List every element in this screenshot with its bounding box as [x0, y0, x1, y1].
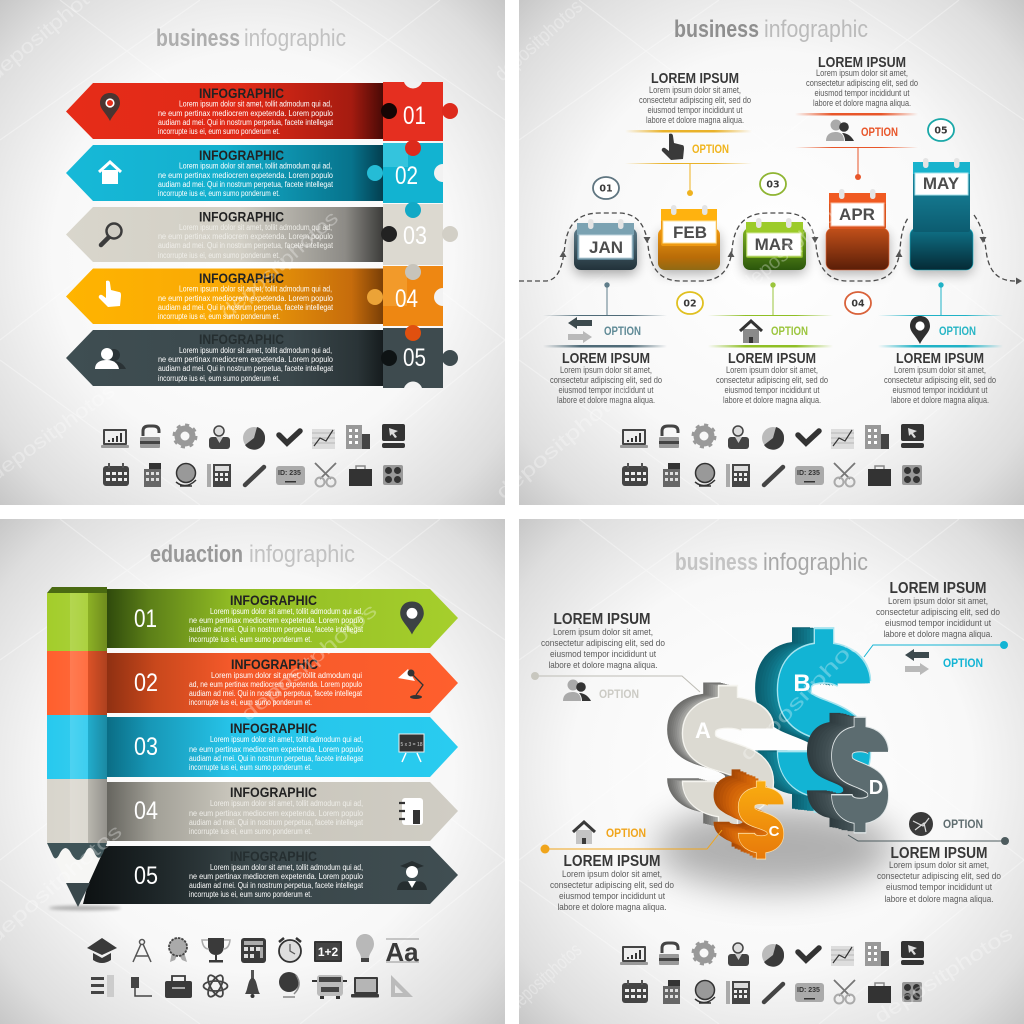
calendar APR: APR [839, 205, 875, 224]
arrow row 04 amber [66, 268, 383, 324]
callout: mar option: consectetur adipiscing elit, sed do [716, 375, 828, 385]
calendar MAR [743, 218, 806, 274]
callout B: Lorem ipsum dolor sit amet, [888, 596, 988, 606]
arrow row 01 red [66, 83, 383, 139]
heading: infographic: INFOGRAPHIC [230, 592, 317, 608]
badge 03: 03 [766, 180, 780, 190]
badge 03 [760, 173, 786, 195]
text block: ne eum pertinax mediocrem expetenda. Lorem populo [189, 616, 363, 625]
arrow row 04 beige [107, 782, 458, 841]
text block: ne eum pertinax mediocrem expetenda. Lorem populo [158, 294, 333, 303]
callout D: LOREM IPSUM [890, 845, 988, 862]
icon: desk globe [279, 972, 299, 997]
text block: ne eum pertinax mediocrem expetenda. Lorem populo [158, 232, 333, 241]
watermark: depositphotos [505, 939, 586, 1016]
heading: infographic: INFOGRAPHIC [199, 270, 284, 286]
title: business infographic [674, 16, 868, 43]
badge 05 [928, 119, 954, 141]
text block: incorrupte ius ei, eum sumo ponderum et. [158, 374, 280, 383]
callout: feb option [625, 70, 752, 196]
heading: infographic: INFOGRAPHIC [231, 656, 318, 672]
title: eduaction infographic [150, 541, 355, 568]
text block: incorrupte ius ei, eum sumo ponderum et. [158, 127, 280, 136]
text block: audiam ad mei. Qui in nostrum perpetua, facete intellegat [189, 689, 363, 698]
arrow row 02 orange [107, 653, 458, 713]
watermark [0, 600, 381, 949]
calendar FEB [658, 205, 720, 274]
text block: Lorem ipsum dolor sit amet, tollit admodum qui ad, [210, 799, 363, 808]
number: 01 [134, 605, 157, 633]
icon: businessman [209, 426, 230, 449]
text block: ne eum pertinax mediocrem expetenda. Lorem populo [189, 809, 363, 818]
calendar MAY: MAY [923, 174, 960, 193]
callout: may option: OPTION [939, 324, 976, 338]
icon: school bell [245, 970, 260, 998]
callout: feb option: consectetur adipiscing elit, sed do [639, 95, 751, 105]
badge 02 [677, 292, 703, 314]
text block: audiam ad mei. Qui in nostrum perpetua, facete intellegat [189, 754, 364, 763]
callout: apr option: labore et dolore magna aliqua. [813, 98, 911, 108]
callout D: Lorem ipsum dolor sit amet, [889, 860, 989, 870]
text block: incorrupte ius ei, eum sumo ponderum et. [189, 827, 312, 836]
callout: apr option: eiusmod tempor incididunt ut [814, 88, 910, 98]
text block: audiam ad mei. Qui in nostrum perpetua, facete intellegat [158, 180, 334, 189]
icon: check mark [279, 431, 300, 443]
callout: may option: eiusmod tempor incididunt ut [892, 385, 988, 395]
icon: calendar [103, 463, 129, 486]
text block: Lorem ipsum dolor sit amet, tollit admodum qui [211, 671, 362, 680]
text block: Lorem ipsum dolor sit amet, tollit admodum qui ad, [210, 607, 363, 616]
text block [158, 100, 334, 136]
puzzle piece 04 [367, 264, 443, 326]
text block: audiam ad mei. Qui in nostrum perpetua, facete intellegat [158, 241, 334, 250]
callout: feb option: LOREM IPSUM [651, 70, 739, 87]
text block: audiam ad mei. Qui in nostrum perpetua, facete intellegat [158, 364, 334, 373]
calendar MAR: MAR [755, 235, 793, 254]
callout: jan option: OPTION [604, 324, 641, 338]
arrow row 02 teal [66, 145, 383, 201]
badge 04 [845, 292, 871, 314]
text block: Lorem ipsum dolor sit amet, tollit admodum qui ad, [179, 162, 332, 171]
text block [189, 607, 364, 644]
callout: mar option: OPTION [771, 324, 808, 338]
callout A: eiusmod tempor incididunt ut [550, 649, 656, 659]
watermark [505, 614, 1017, 1024]
heading: infographic: INFOGRAPHIC [199, 331, 284, 347]
callout B: labore et dolore magna aliqua. [884, 629, 992, 639]
icon: alarm clock [279, 938, 301, 962]
pencil [47, 587, 121, 910]
text block [189, 735, 364, 772]
icon: id card: ID: 235 [278, 470, 301, 477]
puzzle piece 02: 02 [395, 162, 418, 190]
callout C: consectetur adipiscing elit, sed do [550, 880, 674, 890]
arrow row 03 blue [107, 717, 458, 777]
icon: office block [144, 463, 161, 487]
icon: magnifier [101, 224, 122, 245]
puzzle piece 05 [381, 325, 458, 388]
number: 04 [134, 797, 158, 825]
text block: ne eum pertinax mediocrem expetenda. Lorem populo [189, 872, 363, 881]
icon: set square [391, 975, 413, 997]
text block: ne eum pertinax mediocrem expetenda. Lorem populo [189, 745, 363, 754]
icon: usb cable [131, 977, 152, 996]
callout D: consectetur adipiscing elit, sed do [877, 871, 1001, 881]
calendar FEB: FEB [673, 223, 707, 242]
callout: mar option: labore et dolore magna aliqua. [723, 395, 821, 405]
text block [158, 223, 334, 260]
text block: audiam ad mei. Qui in nostrum perpetua, facete intellegat [189, 881, 364, 890]
text block: ne eum pertinax mediocrem expetenda. Lorem populo [158, 355, 333, 364]
callout: may option [878, 282, 1003, 405]
callout D: labore et dolore magna aliqua. [884, 894, 994, 904]
callout B: eiusmod tempor incididunt ut [885, 618, 991, 628]
icon: trophy [202, 938, 230, 962]
callout: jan option [543, 282, 667, 405]
calendar APR [826, 189, 889, 274]
dollar B: B [793, 670, 811, 697]
title: business infographic: infographic [244, 25, 346, 52]
badge 04: 04 [851, 298, 865, 310]
callout: jan option: Lorem ipsum dolor sit amet, [560, 365, 652, 375]
badge 02: 02 [683, 298, 697, 310]
icon: blackboard: 5 x 3 = 18 [400, 742, 423, 748]
icon: house [99, 162, 121, 184]
icon: line chart [312, 429, 335, 449]
panel: business puzzle arrows [0, 0, 505, 505]
text block: audiam ad mei. Qui in nostrum perpetua, facete intellegat [158, 303, 334, 312]
badge 01: 01 [599, 184, 613, 194]
dollar D: D [869, 777, 883, 799]
icon set: business [101, 424, 405, 487]
icon: pointing hand [99, 281, 121, 307]
icon set: business [620, 424, 924, 487]
callout: may option: consectetur adipiscing elit, sed do [884, 375, 996, 385]
callout: may option: LOREM IPSUM [896, 350, 984, 367]
callout A: consectetur adipiscing elit, sed do [541, 638, 665, 648]
title: business infographic: business [156, 25, 240, 52]
callout B: consectetur adipiscing elit, sed do [876, 607, 1000, 617]
icon: blackboard [399, 734, 424, 762]
text block: audiam ad mei. Qui in nostrum perpetua, facete intellegat [189, 818, 364, 827]
icon: scissors [315, 463, 336, 486]
callout A: Lorem ipsum dolor sit amet, [553, 627, 653, 637]
watermark: depositphotos [737, 199, 847, 296]
text block [189, 671, 363, 707]
callout B [864, 580, 1008, 675]
icon: graduate [397, 861, 427, 890]
callout: feb option: labore et dolore magna aliqua. [646, 115, 744, 125]
icon: light bulb [356, 934, 374, 962]
watermark: depositphotos [237, 600, 381, 726]
callout: mar option: Lorem ipsum dolor sit amet, [726, 365, 818, 375]
text block: Lorem ipsum dolor sit amet, tollit admodum qui ad, [210, 863, 363, 872]
text block: audiam ad mei. Qui in nostrum perpetua, facete intellegat [189, 625, 364, 634]
watermark: depositphotos [736, 614, 884, 765]
dollar A: A [695, 718, 711, 743]
text block: incorrupte ius ei, eum sumo ponderum et. [189, 763, 312, 772]
icon: graduation cap [87, 938, 117, 963]
dashed timeline path [519, 213, 1022, 284]
text block [189, 799, 364, 836]
icon: gear [174, 425, 196, 447]
ground shadow [655, 806, 895, 890]
watermark [491, 0, 847, 504]
text block: Lorem ipsum dolor sit amet, tollit admodum qui ad, [210, 735, 363, 744]
callout: mar option [708, 282, 833, 405]
callout: jan option: labore et dolore magna aliqua. [557, 395, 655, 405]
callout: apr option: Lorem ipsum dolor sit amet, [816, 68, 908, 78]
callout B: OPTION [943, 656, 983, 670]
heading: infographic: INFOGRAPHIC [199, 85, 284, 101]
callout: jan option: consectetur adipiscing elit, sed do [550, 375, 662, 385]
dollar C [721, 769, 780, 860]
callout: apr option [795, 54, 918, 180]
watermark [0, 0, 343, 486]
callout C: LOREM IPSUM [564, 853, 660, 870]
callout: apr option: OPTION [861, 125, 898, 139]
callout C: eiusmod tempor incididunt ut [559, 891, 665, 901]
arrow row 05 slate [83, 846, 458, 904]
callout: feb option: OPTION [692, 142, 729, 156]
text block: incorrupte ius ei, eum sumo ponderum et. [189, 698, 312, 707]
callout C: OPTION [606, 826, 646, 840]
callout: may option: Lorem ipsum dolor sit amet, [894, 365, 986, 375]
text block [158, 162, 334, 198]
callout D [848, 812, 1009, 904]
arrow row 05 slate [66, 330, 383, 386]
number: 05 [134, 862, 158, 890]
text block: ad, ne eum pertinax mediocrem expetenda. Lorem populo [189, 680, 362, 689]
text block: incorrupte ius ei, eum sumo ponderum et. [158, 251, 280, 260]
icon: user [95, 348, 126, 369]
callout: feb option: Lorem ipsum dolor sit amet, [649, 85, 741, 95]
icon: calculator keys [383, 465, 403, 485]
icon set: education [87, 934, 419, 999]
puzzle piece 01: 01 [403, 102, 426, 130]
icon: id card [276, 466, 305, 485]
number: 03 [134, 733, 158, 761]
badge 01 [593, 177, 619, 199]
icon: compass [133, 940, 151, 962]
icon: medal [169, 938, 187, 962]
text block: Lorem ipsum dolor sit amet, tollit admodum qui ad, [179, 285, 332, 294]
icon: globe [176, 464, 196, 486]
icon: school bus [312, 975, 347, 999]
text block [158, 346, 334, 383]
text block: ne eum pertinax mediocrem expetenda. Lorem populo [158, 109, 333, 118]
calendar JAN [574, 219, 637, 274]
puzzle piece 01 [381, 82, 458, 141]
title: business infographic: infographic [764, 16, 868, 43]
icon: notebook [399, 798, 423, 825]
callout A: LOREM IPSUM [554, 611, 650, 628]
badge 05: 05 [934, 126, 948, 136]
puzzle piece 03 [381, 202, 458, 265]
icon: computer monitor [382, 424, 405, 448]
title: business infographic [675, 549, 868, 576]
callout B: LOREM IPSUM [890, 580, 986, 597]
heading: infographic: INFOGRAPHIC [230, 720, 317, 736]
icon: map pin [400, 601, 424, 635]
callout: may option: labore et dolore magna aliqua. [891, 395, 989, 405]
icon: calculator [207, 464, 231, 487]
heading: infographic: INFOGRAPHIC [199, 147, 284, 163]
callout: mar option: LOREM IPSUM [728, 350, 816, 367]
callout A [531, 611, 700, 701]
callout: jan option: LOREM IPSUM [562, 350, 650, 367]
icon: briefcase [349, 466, 372, 486]
callout: feb option: eiusmod tempor incididunt ut [648, 105, 743, 115]
icon: map pin [100, 93, 120, 121]
dollar D [817, 713, 883, 833]
icon: atom [204, 973, 228, 999]
callout D: OPTION [943, 817, 983, 831]
heading: infographic: INFOGRAPHIC [230, 848, 317, 864]
icon: toolbox [165, 976, 192, 998]
icon: pen [245, 467, 264, 485]
panel: business timeline calendars [491, 0, 1024, 505]
text block: incorrupte ius ei, eum sumo ponderum et. [189, 890, 312, 899]
callout A: OPTION [599, 687, 639, 701]
callout: apr option: LOREM IPSUM [818, 54, 906, 71]
icon set: business [620, 941, 924, 1004]
text block: incorrupte ius ei, eum sumo ponderum et. [158, 189, 280, 198]
icon: pie chart [243, 427, 265, 450]
icon: city buildings [346, 425, 370, 449]
title: business infographic: business [674, 16, 759, 43]
callout: jan option: eiusmod tempor incididunt ut [558, 385, 654, 395]
icon: blackboard sum [314, 941, 342, 962]
icon: calculator [241, 938, 266, 963]
text block: Lorem ipsum dolor sit amet, tollit admodum qui ad, [179, 346, 332, 355]
calendar MAY [910, 158, 973, 274]
number: 02 [134, 669, 158, 697]
callout C [540, 822, 722, 912]
callout D: eiusmod tempor incididunt ut [886, 882, 992, 892]
calendar JAN: JAN [589, 238, 623, 257]
title: eduaction infographic: infographic [249, 541, 355, 568]
text block: ne eum pertinax mediocrem expetenda. Lorem populo [158, 171, 333, 180]
icon: typography: Aa [385, 937, 419, 967]
icon: open lock [140, 426, 160, 448]
puzzle piece 04: 04 [395, 285, 418, 313]
heading: infographic: INFOGRAPHIC [199, 209, 284, 225]
dollar A [683, 682, 757, 829]
panel: education pencil arrows [0, 519, 505, 1024]
title: eduaction infographic: eduaction [150, 541, 243, 568]
text block: Lorem ipsum dolor sit amet, tollit admodum qui ad, [179, 223, 332, 232]
dollar C: C [769, 823, 780, 840]
text block [189, 863, 364, 899]
title: business infographic [156, 25, 346, 52]
text block: Lorem ipsum dolor sit amet, tollit admodum qui ad, [179, 100, 332, 109]
puzzle piece 02 [367, 140, 443, 203]
icon: list [91, 975, 114, 997]
heading: infographic: INFOGRAPHIC [230, 784, 317, 800]
title: business infographic: business [675, 549, 758, 576]
callout C: Lorem ipsum dolor sit amet, [562, 869, 662, 879]
arrow row 03 beige [66, 207, 383, 262]
icon: laptop board [351, 977, 379, 998]
puzzle piece 03: 03 [403, 222, 427, 250]
text block: audiam ad mei. Qui in nostrum perpetua, facete intellegat [158, 118, 334, 127]
icon: blackboard sum: 1+2 [318, 945, 339, 959]
icon: desk lamp [398, 669, 423, 699]
watermark: depositphotos [217, 207, 343, 324]
dollar B [771, 627, 854, 813]
arrow row 01 green [107, 589, 458, 648]
puzzle piece 05: 05 [403, 344, 426, 372]
panel: business 3D dollars [505, 519, 1024, 1024]
callout C: labore et dolore magna aliqua. [558, 902, 666, 912]
watermark: depositphotos [492, 378, 636, 504]
icon: laptop chart [101, 429, 129, 448]
callout A: labore et dolore magna aliqua. [548, 660, 658, 670]
text block [158, 285, 334, 321]
text block: incorrupte ius ei, eum sumo ponderum et. [189, 635, 312, 644]
text block: incorrupte ius ei, eum sumo ponderum et. [158, 312, 280, 321]
title: business infographic: infographic [763, 549, 868, 576]
callout: apr option: consectetur adipiscing elit, sed do [806, 78, 918, 88]
callout: mar option: eiusmod tempor incididunt ut [724, 385, 820, 395]
